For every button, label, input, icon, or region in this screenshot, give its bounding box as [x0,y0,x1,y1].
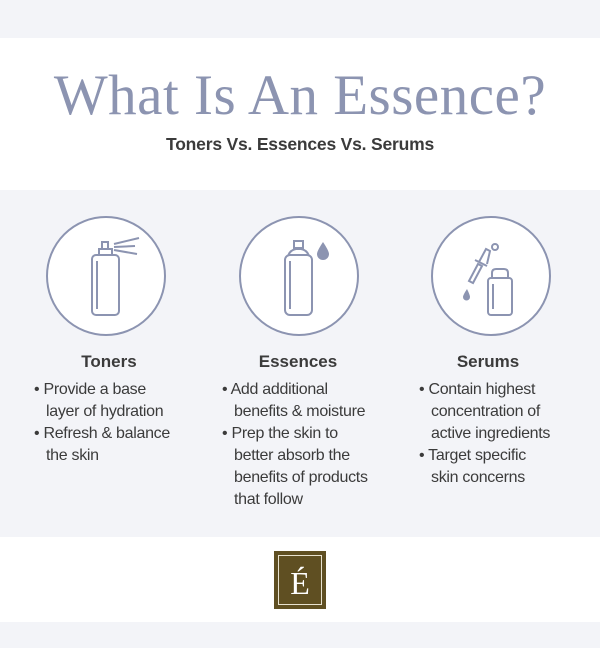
column: essences: Essences [259,352,337,371]
column: essences: better absorb the [234,447,350,464]
column: toners: the skin [46,447,99,464]
column: serums: Serums [457,352,519,371]
column: essences: that follow [234,491,303,508]
column: toners: Toners [81,352,137,371]
column: essences [222,352,368,508]
column: serums: • Target specific [419,447,526,464]
column: serums: concentration of [431,403,540,420]
column: toners: layer of hydration [46,403,163,420]
title: What Is An Essence? [54,64,546,127]
column: serums: • Contain highest [419,381,535,398]
column: essences: • Add additional [222,381,328,398]
column: serums: skin concerns [431,469,525,486]
logo [274,551,326,609]
column: essences: • Prep the skin to [222,425,338,442]
column: serums [419,352,550,486]
column: toners: • Refresh & balance [34,425,170,442]
column: toners: • Provide a base [34,381,146,398]
column: toners [34,352,170,464]
subtitle: Toners Vs. Essences Vs. Serums [166,134,434,154]
column: serums: active ingredients [431,425,550,442]
column: essences: benefits of products [234,469,368,486]
logo: É [290,565,310,601]
column: essences: benefits & moisture [234,403,365,420]
